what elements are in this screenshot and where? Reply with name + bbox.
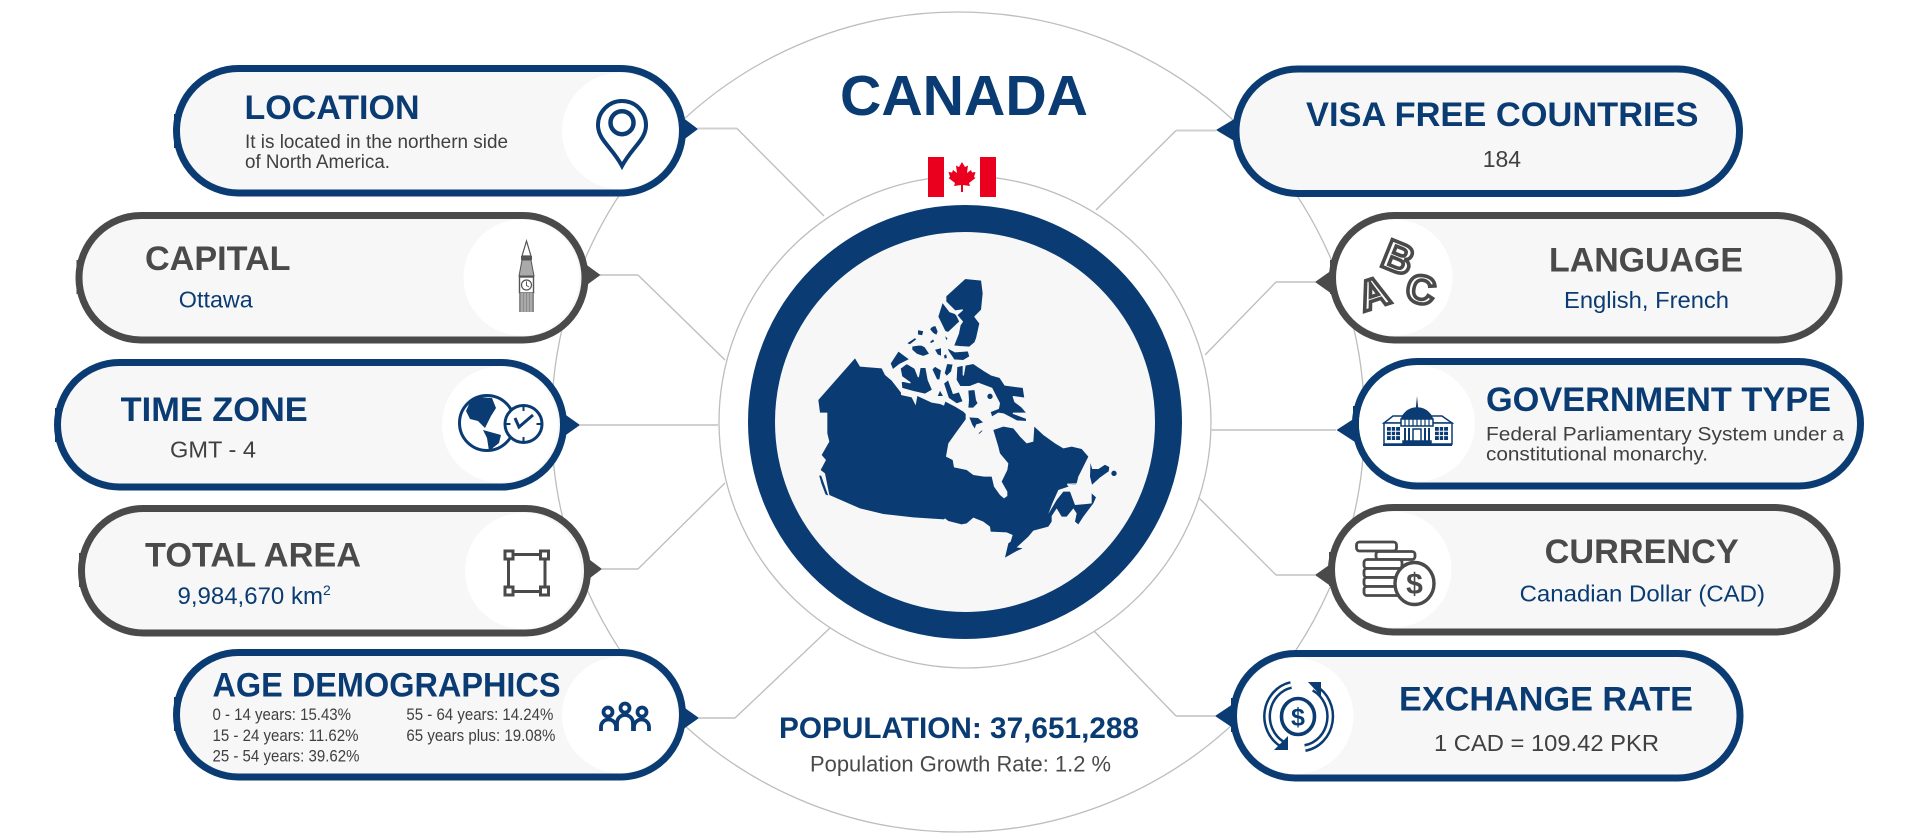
panel: location [174,68,698,193]
heading: LANGUAGE [1549,242,1743,280]
age breakdown: 15 - 24 years: 11.62% [212,727,358,745]
icon: ABC letters: C [1402,266,1439,315]
icon: coins: $ [1406,568,1423,601]
age breakdown: 25 - 54 years: 39.62% [212,748,360,766]
panel: government type [1336,362,1860,486]
icon: coins [1356,542,1434,604]
inner ring [719,176,1211,668]
heading: VISA FREE COUNTRIES [1306,96,1698,134]
heading: CURRENCY [1545,533,1739,571]
heading: GOVERNMENT TYPE [1486,381,1831,419]
population text [779,712,1139,776]
value: 9,984,670 km [178,583,323,610]
population text: Population Growth Rate: 1.2 % [810,752,1111,776]
age breakdown: 65 years plus: 19.08% [406,727,555,745]
icon: clock tower [519,241,534,312]
population text: POPULATION: 37,651,288 [779,712,1139,745]
description [245,131,508,173]
value: English, French [1564,287,1729,313]
heading: EXCHANGE RATE [1399,681,1693,719]
map of Canada [818,278,1117,558]
value: 1 CAD = 109.42 PKR [1434,730,1659,756]
heading: CAPITAL [145,240,290,278]
heading: TIME ZONE [121,391,308,429]
age breakdown: 0 - 14 years: 15.43% [212,706,351,724]
title: CANADA [840,64,1088,128]
icon: Canadian flag [928,157,996,197]
value: GMT - 4 [170,437,256,463]
heading: AGE DEMOGRAPHICS [212,667,560,705]
age breakdown [212,706,555,766]
panel: total area [79,508,602,633]
icon: three people [601,704,649,731]
icon: ABC letters: B [1376,230,1421,285]
description: Federal Parliamentary System under a [1486,424,1844,446]
heading: LOCATION [244,89,420,127]
panel: capital [76,216,600,340]
panel: time zone [55,362,580,487]
value: Ottawa [179,287,254,313]
icon: parliament building [1383,396,1452,446]
icon: ABC letters: A [1352,266,1395,320]
age breakdown: 55 - 64 years: 14.24% [406,706,553,724]
icon: currency exchange: $ [1291,704,1305,732]
central map badge [762,218,1168,626]
icon: area square [505,551,548,595]
connector lines [580,128,1336,718]
icon: currency exchange [1267,682,1330,750]
icon: ABC letters [1352,230,1439,320]
icon: map pin [598,101,646,166]
panel: age demographics [174,652,699,777]
icon: globe and clock [460,396,542,451]
description [1486,424,1844,466]
heading: TOTAL AREA [145,537,361,575]
description: constitutional monarchy. [1486,444,1708,466]
panel: language [1315,216,1839,340]
panel: exchange rate [1215,654,1740,778]
value: Canadian Dollar (CAD) [1520,581,1765,607]
description: It is located in the northern side [245,131,508,153]
panel: currency [1315,508,1837,632]
value: 2 [323,582,331,598]
panel: visa free countries [1216,69,1740,194]
description: of North America. [245,151,390,173]
value: 184 [1483,146,1521,172]
outer ring [552,12,1364,832]
